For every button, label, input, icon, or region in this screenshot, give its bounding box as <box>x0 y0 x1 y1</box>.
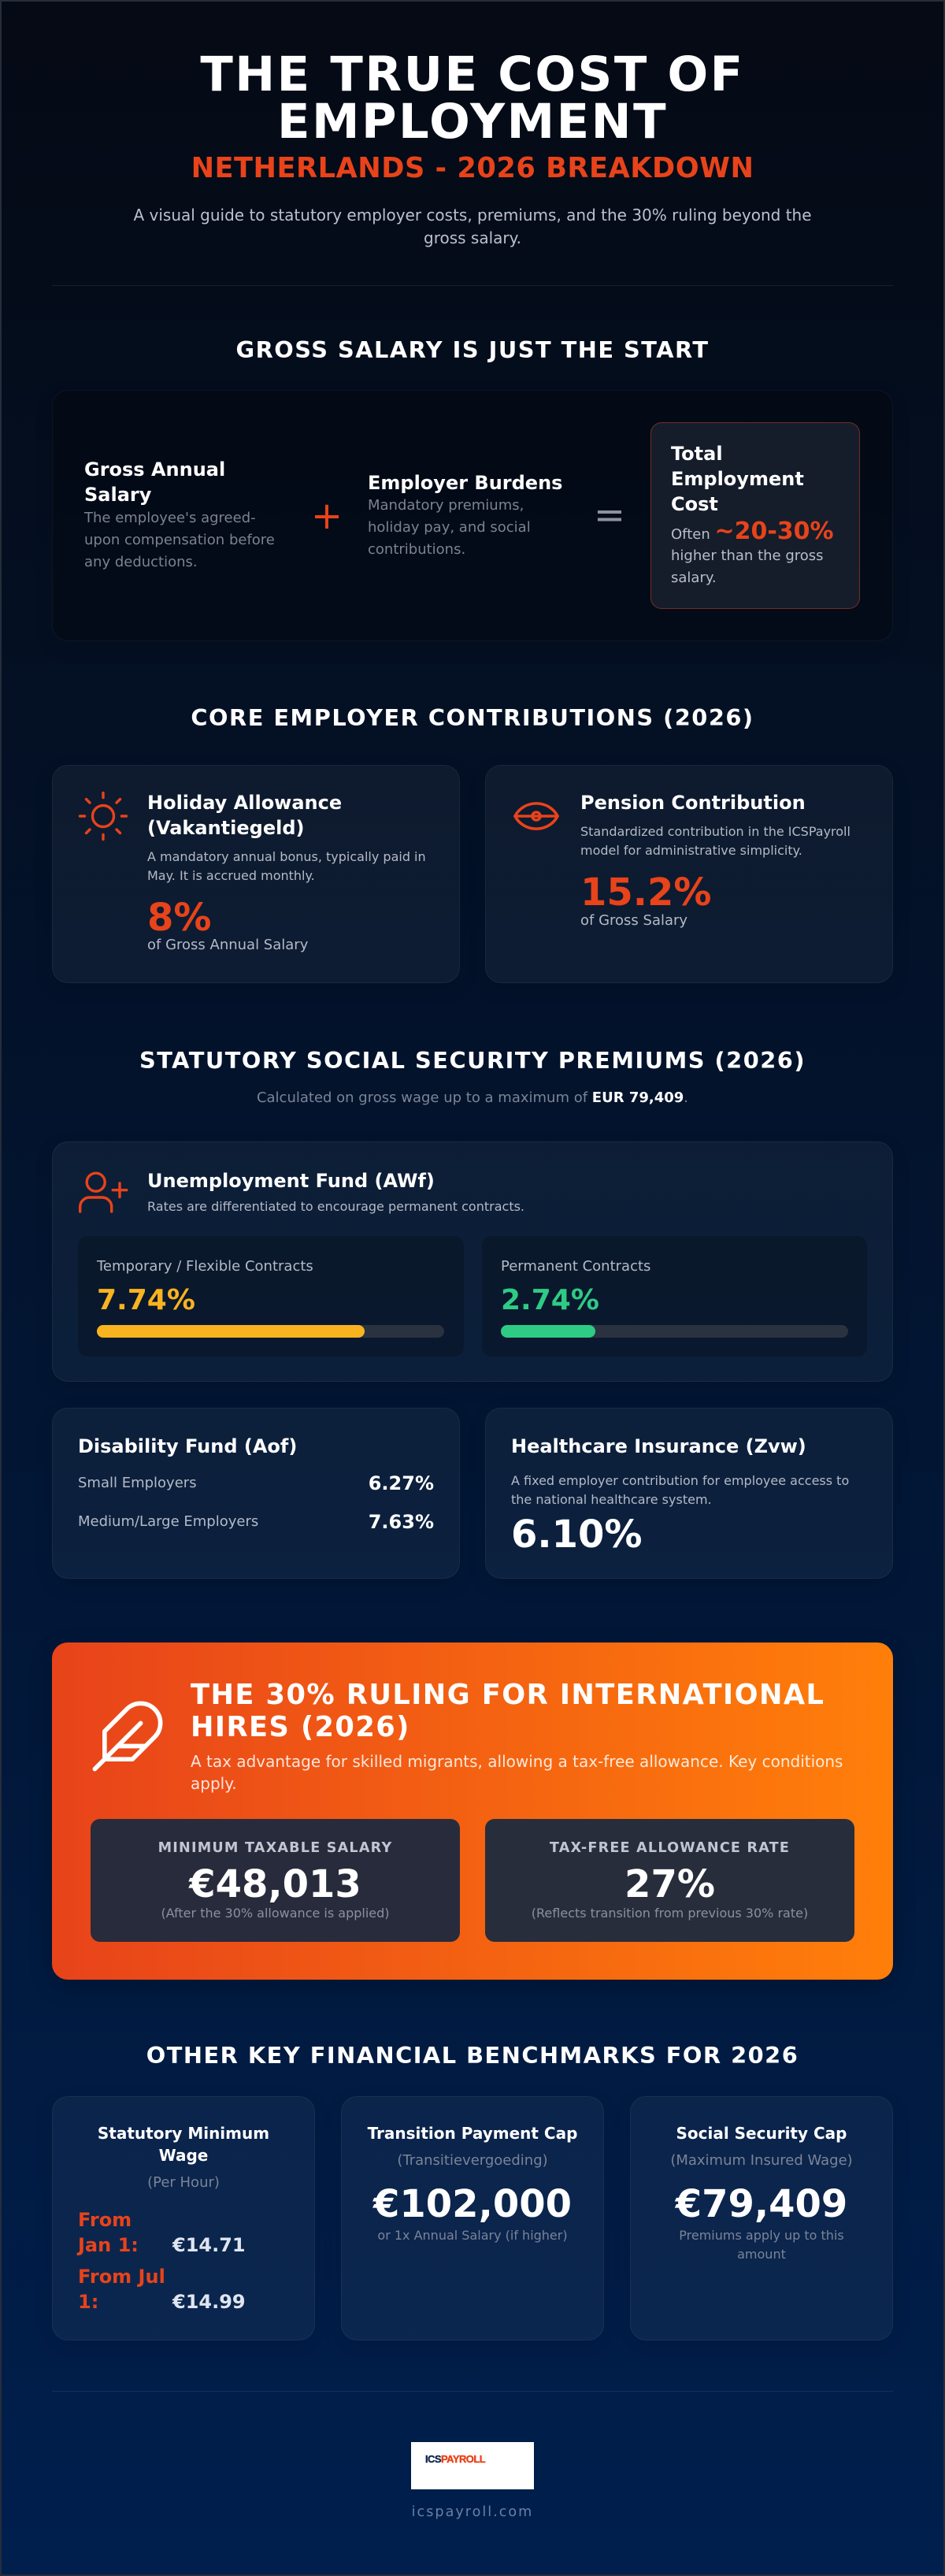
january label: Jan 1: <box>78 2234 139 2256</box>
unemployment description: Rates are differentiated to encourage permanent contracts. <box>147 1199 524 1214</box>
holiday title <box>147 792 342 839</box>
ruling description: apply. <box>191 1774 237 1793</box>
small employers label: Small Employers <box>78 1475 197 1491</box>
permanent contracts box <box>482 1236 867 1357</box>
january label <box>77 2209 139 2256</box>
pension unit: of Gross Salary <box>580 912 687 929</box>
gross salary description: any deductions. <box>84 554 198 570</box>
disability title: Disability Fund (Aof) <box>78 1435 297 1457</box>
employer burdens description: holiday pay, and social <box>368 519 531 536</box>
intro text <box>133 206 812 247</box>
icon: sun <box>79 791 128 841</box>
pension value: 15.2% <box>580 870 712 915</box>
total title: Total <box>671 443 723 465</box>
plus sign: + <box>311 494 343 538</box>
transition note: or 1x Annual Salary (if higher) <box>377 2228 568 2243</box>
transition subtitle: (Transitievergoeding) <box>397 2152 548 2169</box>
social security note <box>679 2228 844 2262</box>
ruling title <box>191 1679 825 1743</box>
panel: 30% ruling <box>52 1642 893 1980</box>
holiday unit: of Gross Annual Salary <box>147 937 308 953</box>
small employers rate: 6.27% <box>369 1472 434 1494</box>
healthcare title: Healthcare Insurance (Zvw) <box>511 1435 806 1457</box>
july label: 1: <box>78 2291 98 2313</box>
row: medium large employers <box>78 1511 434 1533</box>
total title: Cost <box>671 493 718 515</box>
panel: healthcare insurance <box>485 1408 893 1579</box>
header <box>133 47 812 247</box>
title: THE TRUE COST OF <box>200 47 745 102</box>
panel: unemployment fund <box>52 1141 893 1382</box>
ruling title: HIRES (2026) <box>191 1711 410 1743</box>
row: small employers <box>78 1472 434 1494</box>
rate from july <box>78 2266 246 2313</box>
unemployment title: Unemployment Fund (AWf) <box>147 1170 435 1192</box>
ruling title: THE 30% RULING FOR INTERNATIONAL <box>191 1679 825 1711</box>
minimum salary note: (After the 30% allowance is applied) <box>161 1906 390 1921</box>
logo wordmark: ICSPAYROLL <box>425 2453 485 2465</box>
total description: salary. <box>671 570 717 586</box>
holiday description <box>147 849 426 883</box>
pension description: model for administrative simplicity. <box>580 843 802 858</box>
holiday title: Holiday Allowance <box>147 792 342 814</box>
total percentage: Often ~20-30% <box>671 518 834 545</box>
panel: pension contribution <box>485 765 893 983</box>
minimum wage title <box>98 2124 269 2165</box>
employer burdens description <box>368 497 531 558</box>
january rate: €14.71 <box>172 2234 246 2256</box>
gross salary title: Gross Annual <box>84 458 225 481</box>
minimum salary label: MINIMUM TAXABLE SALARY <box>158 1840 392 1856</box>
panel: social security cap <box>630 2096 893 2340</box>
ruling description: A tax advantage for skilled migrants, allowing a tax-free allowance. Key conditions <box>191 1752 843 1771</box>
gross salary title: Salary <box>84 484 151 506</box>
allowance rate note: (Reflects transition from previous 30% rate) <box>532 1906 808 1921</box>
temporary bar <box>97 1325 444 1338</box>
footer url: icspayroll.com <box>412 2504 533 2520</box>
healthcare value: 6.10% <box>511 1513 643 1557</box>
gross annual salary <box>83 458 275 570</box>
employer burdens <box>368 472 562 558</box>
permanent bar <box>501 1325 848 1338</box>
social security note: Premiums apply up to this <box>679 2228 844 2243</box>
medium large rate: 7.63% <box>369 1511 434 1533</box>
heading: core contributions: CORE EMPLOYER CONTRIBUTIONS (2026) <box>191 704 754 731</box>
ruling description <box>191 1752 843 1793</box>
heading: gross salary: GROSS SALARY IS JUST THE START <box>235 336 710 363</box>
medium large label: Medium/Large Employers <box>78 1513 258 1530</box>
minimum salary box <box>91 1819 460 1942</box>
holiday description: May. It is accrued monthly. <box>147 868 315 883</box>
holiday title: (Vakantiegeld) <box>147 817 304 839</box>
total description <box>671 547 824 586</box>
temporary contracts box <box>78 1236 464 1357</box>
transition value: €102,000 <box>373 2182 572 2226</box>
equals sign: = <box>594 493 625 537</box>
july label <box>78 2266 165 2313</box>
social security note: Calculated on gross wage up to a maximum of EUR 79,409. <box>257 1089 688 1106</box>
pension title: Pension Contribution <box>580 792 806 814</box>
july label: From Jul <box>78 2266 165 2288</box>
social security title: Social Security Cap <box>676 2124 847 2143</box>
panel: holiday allowance <box>52 765 460 983</box>
permanent value: 2.74% <box>501 1284 599 1316</box>
healthcare description: the national healthcare system. <box>511 1492 712 1507</box>
january label: From <box>78 2209 132 2231</box>
intro text: gross salary. <box>424 228 521 247</box>
employer burdens description: contributions. <box>368 541 465 558</box>
total title: Employment <box>671 468 804 490</box>
temporary label: Temporary / Flexible Contracts <box>97 1258 313 1275</box>
panel: cost equation <box>52 390 893 641</box>
social security note: amount <box>737 2247 786 2262</box>
title <box>200 47 745 150</box>
subtitle: NETHERLANDS - 2026 BREAKDOWN <box>191 152 754 184</box>
minimum wage unit: (Per Hour) <box>147 2174 220 2191</box>
panel: transition payment cap <box>341 2096 604 2340</box>
minimum salary value: €48,013 <box>189 1862 361 1906</box>
allowance rate label: TAX-FREE ALLOWANCE RATE <box>550 1840 790 1856</box>
allowance rate value: 27% <box>624 1862 715 1906</box>
pension description <box>580 824 850 858</box>
panel: minimum wage <box>52 2096 315 2340</box>
icon: person plus <box>79 1172 128 1213</box>
icon: feather <box>93 1702 162 1771</box>
gross salary description: The employee's agreed- <box>84 510 256 526</box>
total description: higher than the gross <box>671 547 824 564</box>
minimum wage title: Statutory Minimum <box>98 2124 269 2143</box>
july rate: €14.99 <box>172 2291 246 2313</box>
social security value: €79,409 <box>676 2182 847 2226</box>
pension description: Standardized contribution in the ICSPayroll <box>580 824 850 839</box>
total employment cost box <box>650 422 860 609</box>
social security subtitle: (Maximum Insured Wage) <box>670 2152 853 2169</box>
temporary value: 7.74% <box>97 1284 195 1316</box>
total title <box>671 443 804 515</box>
holiday value: 8% <box>147 896 211 940</box>
permanent label: Permanent Contracts <box>501 1258 650 1275</box>
gross salary description <box>83 510 275 570</box>
holiday description: A mandatory annual bonus, typically paid in <box>147 849 426 864</box>
heading: other benchmarks: OTHER KEY FINANCIAL BENCHMARKS FOR 2026 <box>146 2042 799 2069</box>
minimum wage title: Wage <box>159 2146 208 2165</box>
panel: disability fund <box>52 1408 460 1579</box>
allowance rate box <box>485 1819 854 1942</box>
gross salary description: upon compensation before <box>84 532 275 548</box>
footer logo <box>411 2442 534 2489</box>
gross salary title <box>84 458 225 506</box>
rate from january <box>77 2209 246 2256</box>
healthcare description <box>511 1473 849 1507</box>
employer burdens title: Employer Burdens <box>368 472 562 494</box>
title: EMPLOYMENT <box>277 95 668 150</box>
employer burdens description: Mandatory premiums, <box>368 497 524 514</box>
icon: eye <box>513 802 559 830</box>
intro text: A visual guide to statutory employer costs, premiums, and the 30% ruling beyond the <box>133 206 812 225</box>
transition title: Transition Payment Cap <box>368 2124 577 2143</box>
heading: social security premiums: STATUTORY SOCIAL SECURITY PREMIUMS (2026) <box>139 1047 806 1074</box>
healthcare description: A fixed employer contribution for employee access to <box>511 1473 849 1488</box>
